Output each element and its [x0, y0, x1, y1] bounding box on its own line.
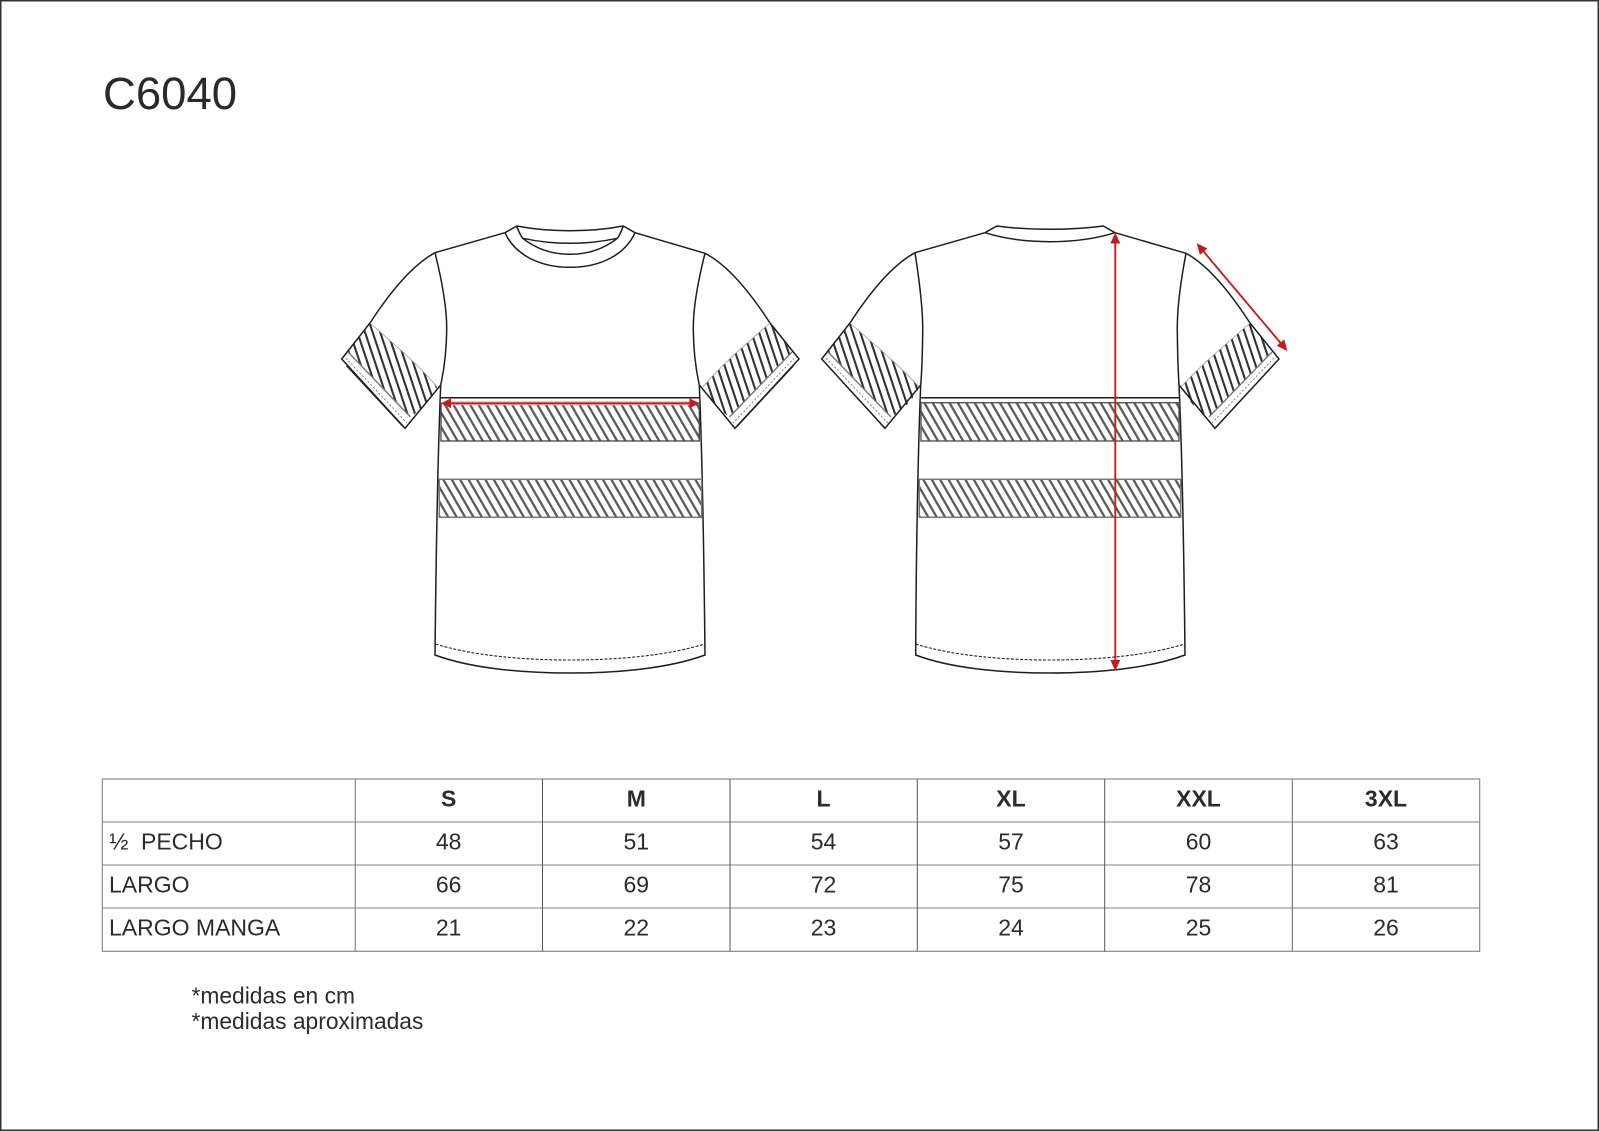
footnotes: *medidas en cm — [192, 982, 355, 1008]
back reflective strip lower — [898, 479, 1206, 517]
row: length: 78 — [1186, 872, 1211, 898]
back yoke seam — [921, 397, 1180, 399]
row: sleeve length: LARGO MANGA — [109, 914, 281, 940]
row: length: LARGO — [109, 872, 190, 898]
header row: S — [441, 786, 456, 812]
row: half chest: 60 — [1186, 828, 1211, 854]
footnotes: *medidas aproximadas — [192, 1008, 423, 1034]
header row: M — [627, 786, 646, 812]
size table — [102, 779, 1480, 951]
length measure arrow — [1110, 233, 1120, 671]
row: half chest: 54 — [811, 828, 836, 854]
row: sleeve length: 25 — [1186, 914, 1211, 940]
row: sleeve length: 26 — [1373, 914, 1399, 940]
row: half chest: ½ — [109, 828, 128, 854]
row: half chest: PECHO — [141, 828, 223, 854]
row: sleeve length: 24 — [998, 914, 1024, 940]
back hem stitching — [916, 644, 1184, 660]
header row: 3XL — [1365, 786, 1407, 812]
header row: L — [816, 786, 831, 812]
front yoke seam — [441, 397, 700, 399]
row: sleeve length — [109, 914, 1399, 940]
row: half chest: 57 — [998, 828, 1024, 854]
back t-shirt — [796, 226, 1304, 673]
row: length: 66 — [436, 872, 461, 898]
row: half chest: 51 — [624, 828, 649, 854]
row: length: 81 — [1373, 872, 1399, 898]
row: length: 72 — [811, 872, 836, 898]
header row — [441, 786, 1407, 812]
row: length: 75 — [998, 872, 1024, 898]
sleeve measure arrow — [1197, 243, 1288, 351]
row: length — [109, 872, 1399, 898]
chest measure arrow — [441, 398, 700, 408]
front right sleeve — [692, 252, 800, 430]
back shirt body — [915, 233, 1186, 673]
table grid — [102, 779, 1480, 951]
row: half chest: 63 — [1373, 828, 1399, 854]
front collar — [505, 226, 635, 267]
row: half chest — [109, 828, 1399, 854]
front shirt body — [435, 233, 705, 673]
front reflective strip upper — [440, 402, 700, 442]
back reflective strip upper — [920, 402, 1180, 442]
front hem stitching — [436, 644, 704, 660]
front t-shirt — [316, 226, 826, 673]
front left sleeve — [340, 252, 448, 430]
row: sleeve length: 23 — [811, 914, 836, 940]
row: length: 69 — [624, 872, 649, 898]
front reflective strip lower — [418, 479, 726, 517]
footnotes — [192, 982, 423, 1034]
back collar — [985, 226, 1115, 242]
back right sleeve — [1176, 252, 1280, 430]
row: sleeve length: 22 — [624, 914, 649, 940]
back left sleeve — [820, 252, 924, 430]
row: half chest: 48 — [436, 828, 461, 854]
header row: XXL — [1176, 786, 1221, 812]
row: sleeve length: 21 — [436, 914, 461, 940]
title: C6040 — [103, 68, 237, 119]
header row: XL — [996, 786, 1026, 812]
